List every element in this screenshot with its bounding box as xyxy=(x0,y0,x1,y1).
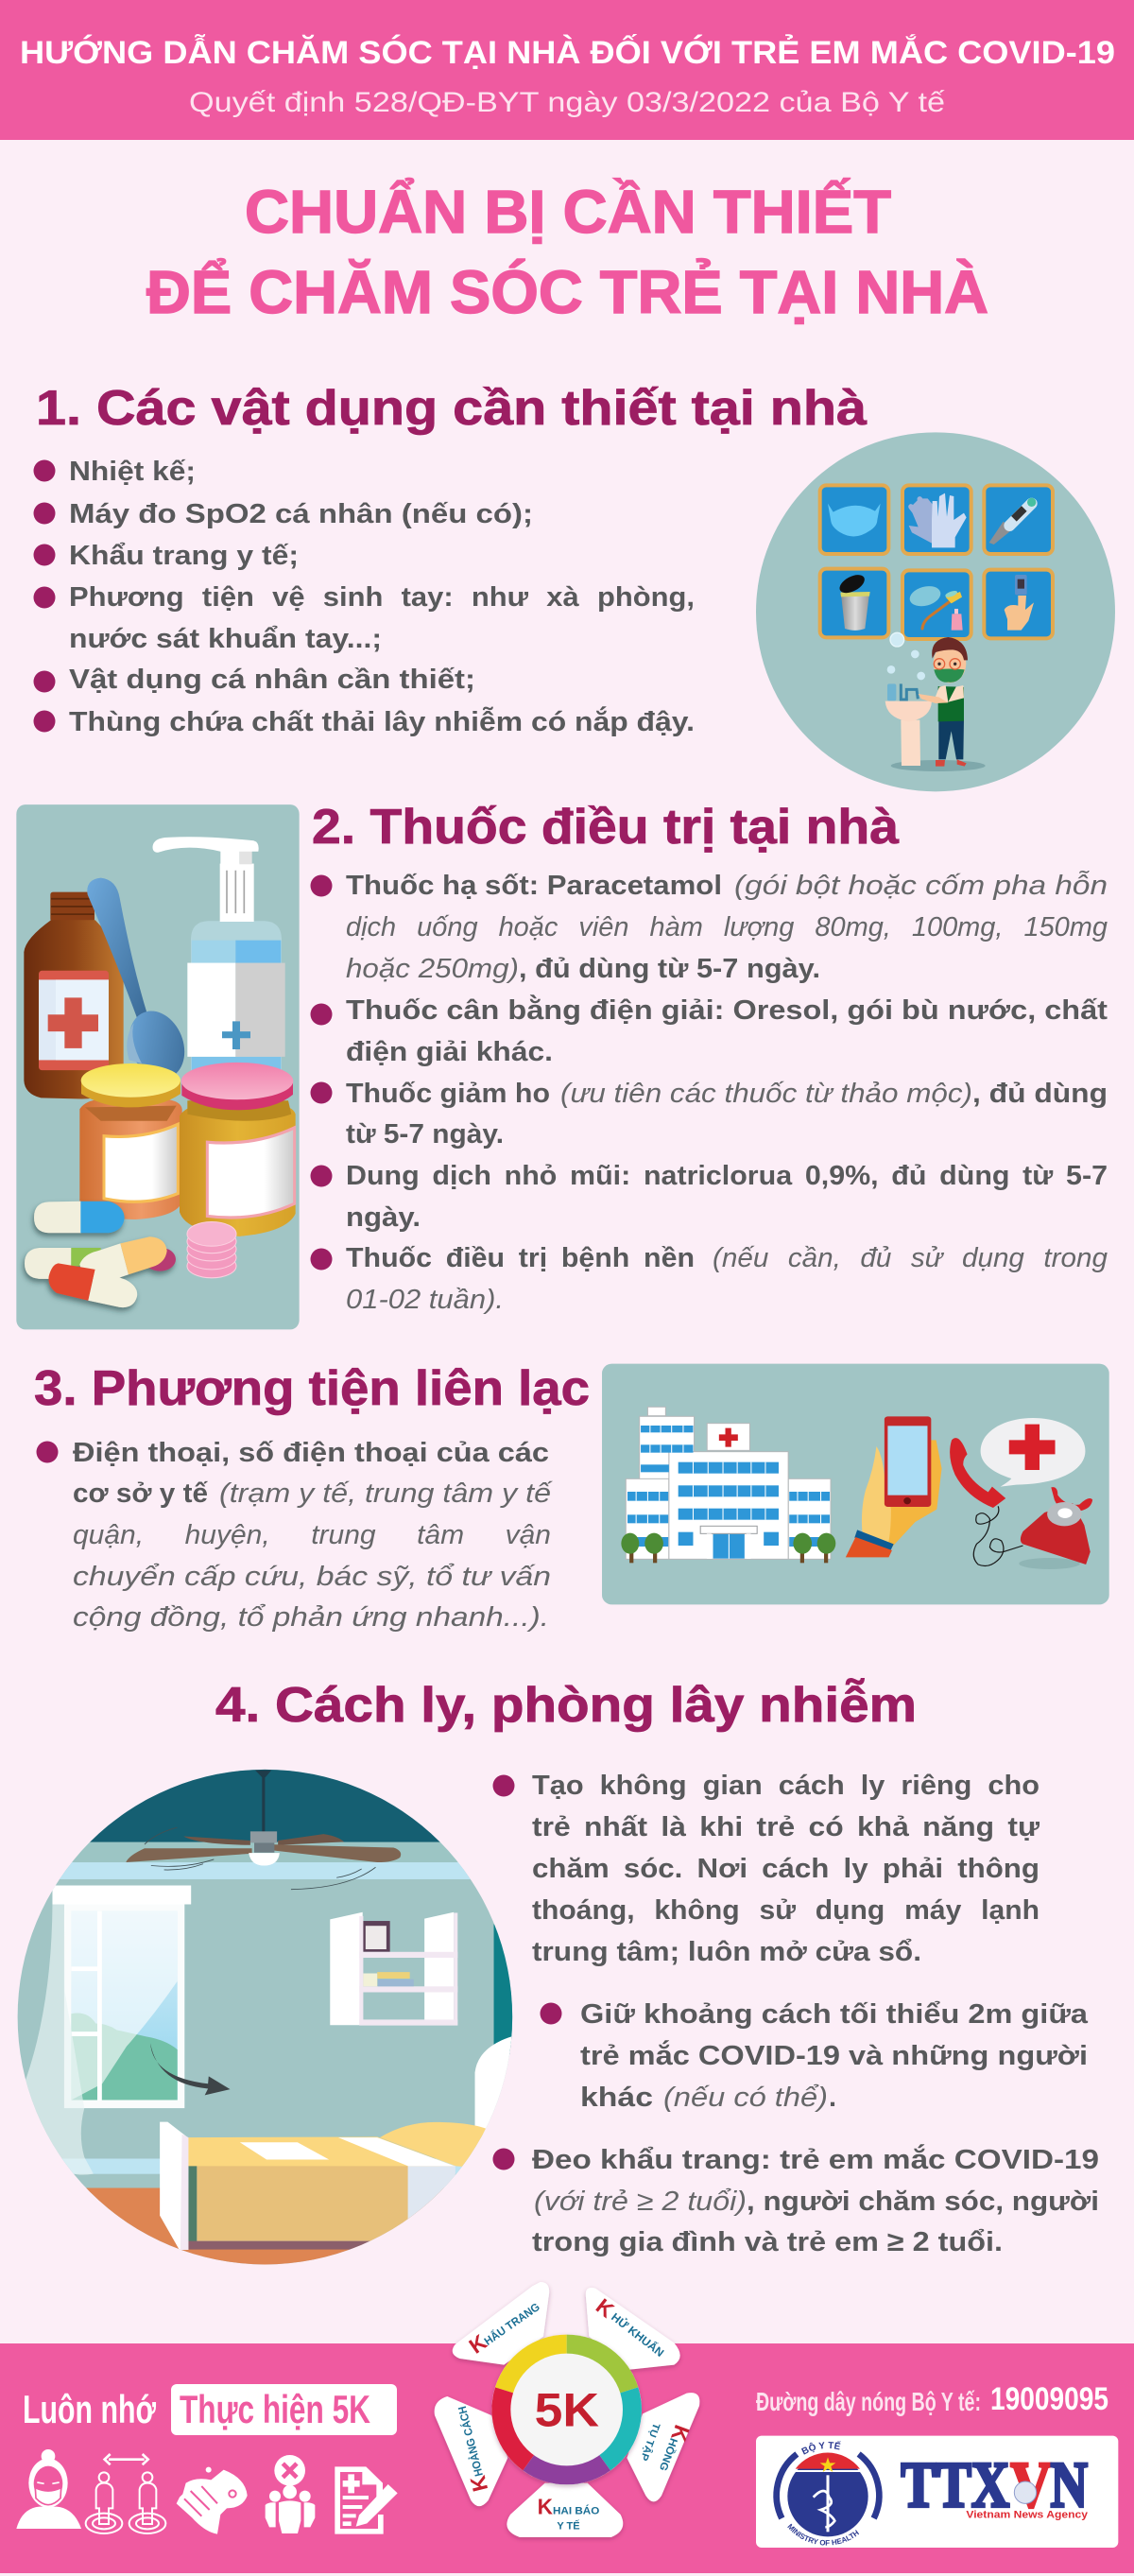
list: household items: Thùng chứa chất thải lây nhiễm có nắp đậy. xyxy=(69,705,695,737)
list: home medicines: Dung dịch nhỏ mũi: natriclorua 0,9%, đủ dùng từ 5-7 xyxy=(346,1161,1108,1191)
list: isolation guidance: Đeo khẩu trang: trẻ em mắc COVID-19 xyxy=(532,2143,1099,2175)
list: home medicines: , đủ dùng xyxy=(972,1079,1108,1109)
list: communication: cộng đồng, tổ phản ứng nhanh...). xyxy=(73,1602,549,1633)
list: isolation guidance: , người chăm sóc, người xyxy=(747,2187,1099,2217)
list: communication: (trạm y tế, trung tâm y tế xyxy=(219,1478,553,1509)
wheel label: 5K xyxy=(535,2384,599,2437)
logo: Ministry of Health: BỘ Y TẾ xyxy=(801,2441,841,2455)
list: home medicines: ngày. xyxy=(346,1202,421,1233)
list: isolation guidance: trẻ nhất là khi trẻ có khả năng tự xyxy=(532,1812,1040,1842)
list: isolation guidance: Tạo không gian cách ly riêng cho xyxy=(532,1771,1040,1801)
list: communication xyxy=(36,1438,553,1633)
icon: gloves xyxy=(902,485,971,554)
wall shelf xyxy=(330,1912,457,2026)
footer: remember 5K label: Thực hiện 5K xyxy=(180,2387,370,2431)
list: home medicines: Thuốc điều trị bệnh nền xyxy=(346,1243,695,1273)
petal: khai báo y tế: K xyxy=(538,2494,554,2518)
gold jar xyxy=(180,1063,296,1236)
petal: không tụ tập: K xyxy=(666,2422,695,2446)
icon: health declaration xyxy=(335,2466,398,2534)
list: household items: Vật dụng cá nhân cần thiết; xyxy=(69,665,475,695)
icon: keep distance xyxy=(86,2454,165,2533)
list: household items: Phương tiện vệ sinh tay: như xà phòng, xyxy=(69,582,695,613)
petal: khoảng cách: K xyxy=(465,2473,492,2494)
heading 2: 2. Thuốc điều trị tại nhà xyxy=(312,800,900,855)
logo: TTXVN: V xyxy=(1010,2449,1052,2521)
hotline: 19009095 xyxy=(990,2381,1108,2417)
5K wheel xyxy=(435,2282,699,2537)
heading 1: 1. Các vật dụng cần thiết tại nhà xyxy=(36,381,868,436)
list: isolation guidance: (nếu có thể) xyxy=(663,2083,828,2113)
list: communication: Điện thoại, số điện thoại của các xyxy=(73,1438,549,1468)
list: isolation guidance xyxy=(493,1771,1099,2257)
petal: khai báo y tế: HAI BÁO xyxy=(553,2504,600,2516)
list: communication: quận, huyện, trung tâm vận xyxy=(73,1520,551,1550)
header title: HƯỚNG DẪN CHĂM SÓC TẠI NHÀ ĐỐI VỚI TRẺ EM MẮC COVID-19 xyxy=(20,34,1115,71)
illustration: household items circle xyxy=(756,432,1115,791)
petal: khoảng cách xyxy=(435,2396,507,2506)
petal: khai báo y tế xyxy=(507,2483,623,2537)
list: home medicines: , đủ dùng từ 5-7 ngày. xyxy=(519,954,820,984)
petal: khử khuẩn: HỬ KHUẨN xyxy=(609,2309,667,2360)
petal: không tụ tập: TỤ TẬP xyxy=(638,2421,662,2463)
icon: soap and toothbrush xyxy=(902,570,971,639)
bed xyxy=(160,2122,488,2250)
petal: khẩu trang xyxy=(453,2282,549,2365)
petal: khử khuẩn: K xyxy=(592,2293,619,2323)
list: home medicines: từ 5-7 ngày. xyxy=(346,1119,504,1150)
icon: washing hands xyxy=(177,2467,248,2534)
list: home medicines: dịch uống hoặc viên hàm lượng 80mg, 100mg, 150mg xyxy=(346,912,1108,942)
list: isolation guidance: trẻ mắc COVID-19 và những người xyxy=(580,2039,1088,2071)
icon: thermometer xyxy=(984,485,1053,554)
footer: remember 5K label xyxy=(23,2384,397,2435)
list: isolation guidance: . xyxy=(829,2083,836,2113)
wheel ring xyxy=(491,2335,642,2484)
logo: TTXVN: TTX xyxy=(901,2449,1009,2521)
list: household items xyxy=(34,457,695,737)
petal: khẩu trang: HẨU TRANG xyxy=(481,2299,542,2348)
icon: face mask xyxy=(820,485,888,554)
list: home medicines xyxy=(310,870,1108,1315)
footer: 5K icons xyxy=(16,2449,398,2534)
list: communication: chuyển cấp cứu, bác sỹ, tổ tư vấn xyxy=(73,1562,551,1592)
list: home medicines: điện giải khác. xyxy=(346,1037,553,1067)
logo: TTXVN: N xyxy=(1051,2449,1088,2521)
list: home medicines: 01-02 tuần). xyxy=(346,1285,504,1315)
list: isolation guidance: khác xyxy=(580,2083,653,2113)
pump bottle xyxy=(153,837,285,1072)
list: household items: Khẩu trang y tế; xyxy=(69,541,299,571)
pink tablets xyxy=(187,1221,236,1278)
list: isolation guidance: chăm sóc. Nơi cách ly phải thông xyxy=(532,1854,1040,1884)
window with curtain xyxy=(23,1886,191,2175)
illustration: boy washing hands xyxy=(885,632,986,771)
heading 3: 3. Phương tiện liên lạc xyxy=(34,1361,590,1416)
list: home medicines: hoặc 250mg) xyxy=(346,954,519,984)
icon: avoid gatherings xyxy=(266,2455,315,2533)
main title xyxy=(146,177,988,326)
petal: khử khuẩn xyxy=(586,2288,680,2370)
footer: remember 5K label: Luôn nhớ xyxy=(23,2387,156,2431)
main title: ĐỂ CHĂM SÓC TRẺ TẠI NHÀ xyxy=(146,257,988,326)
list: home medicines: Thuốc cân bằng điện giải: Oresol, gói bù nước, chất xyxy=(346,994,1108,1026)
icon: waste bin xyxy=(820,569,888,637)
logo: TTXVN: Vietnam News Agency xyxy=(966,2509,1089,2520)
icon: speech bubble with red cross xyxy=(981,1418,1085,1487)
header banner xyxy=(0,0,1134,140)
brown bottle xyxy=(24,892,124,1098)
list: isolation guidance: (với trẻ ≥ 2 tuổi) xyxy=(534,2187,747,2217)
capsules xyxy=(25,1202,176,1307)
list: home medicines: (gói bột hoặc cốm pha hỗn xyxy=(734,870,1108,901)
petal: khẩu trang: K xyxy=(464,2329,491,2359)
petal: khoảng cách: HOẢNG CÁCH xyxy=(455,2405,486,2478)
spoon xyxy=(87,878,196,1089)
logo: Ministry of Health xyxy=(773,2441,883,2546)
list: isolation guidance: trung tâm; luôn mở cửa sổ. xyxy=(532,1937,921,1967)
main title: CHUẨN BỊ CẦN THIẾT xyxy=(245,177,891,246)
illustration: isolation room xyxy=(9,1763,530,2286)
list: household items: nước sát khuẩn tay...; xyxy=(69,624,382,654)
list: communication: cơ sở y tế xyxy=(73,1478,209,1509)
illustration: communication panel xyxy=(602,1364,1109,1604)
hotline: Đường dây nóng Bộ Y tế: xyxy=(756,2387,981,2416)
petal: không tụ tập: HỒNG xyxy=(657,2436,679,2473)
petal: khai báo y tế: Y TẾ xyxy=(557,2519,580,2532)
list: home medicines: (ưu tiên các thuốc từ thảo mộc) xyxy=(560,1079,972,1109)
list: isolation guidance: Giữ khoảng cách tối thiểu 2m giữa xyxy=(580,1999,1089,2030)
ceiling fan xyxy=(126,1771,401,1890)
list: home medicines: Thuốc hạ sốt: Paracetamol xyxy=(346,871,722,901)
orange jar xyxy=(79,1063,182,1219)
header subtitle: Quyết định 528/QĐ-BYT ngày 03/3/2022 của Bộ Y tế xyxy=(189,87,945,118)
illustration: medicine panel xyxy=(16,804,300,1329)
list: household items: Nhiệt kế; xyxy=(69,457,196,487)
list: household items: Máy đo SpO2 cá nhân (nếu có); xyxy=(69,499,533,529)
list: isolation guidance: trong gia đình và trẻ em ≥ 2 tuổi. xyxy=(532,2227,1003,2257)
icon: hand holding phone xyxy=(846,1416,942,1557)
hospital xyxy=(621,1407,835,1563)
logo panel xyxy=(756,2435,1119,2548)
icon: person with mask xyxy=(16,2449,81,2529)
list: home medicines: Thuốc giảm ho xyxy=(346,1079,550,1109)
heading 4: 4. Cách ly, phòng lây nhiễm xyxy=(215,1678,917,1733)
logo: Ministry of Health: MINISTRY OF HEALTH xyxy=(787,2524,860,2546)
petal: không tụ tập xyxy=(627,2393,699,2501)
arrow xyxy=(150,2043,231,2095)
icon: telephone handset and rotary phone xyxy=(950,1438,1092,1569)
list: isolation guidance: thoáng, không sử dụng máy lạnh xyxy=(532,1895,1040,1926)
icon: pulse oximeter xyxy=(984,570,1053,638)
list: home medicines: (nếu cần, đủ sử dụng trong xyxy=(713,1243,1108,1273)
footer band xyxy=(0,2343,1134,2573)
